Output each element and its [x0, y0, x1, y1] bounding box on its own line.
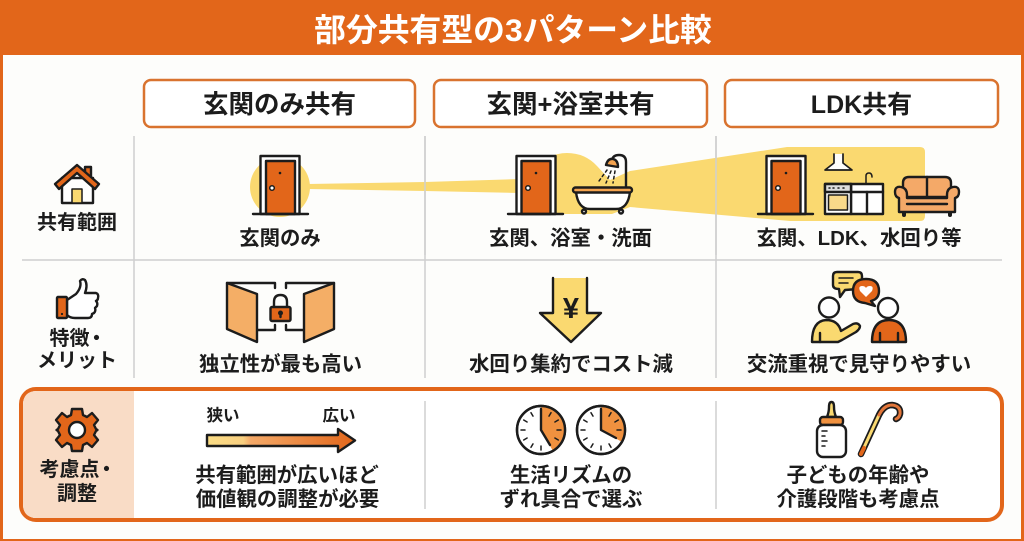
label: 交流重視で見守りやすい: 交流重視で見守りやすい — [747, 353, 971, 376]
icon: house — [55, 165, 99, 203]
text: 生活リズムのずれ具合で選ぶ — [500, 463, 642, 511]
text: 共有範囲が広いほど — [195, 463, 379, 511]
icon: door 1 — [253, 156, 308, 214]
row 1 label: 共有範囲: 共有範囲 — [37, 211, 117, 234]
row 2 label: 特徴・メリット: 特徴・ — [50, 327, 106, 350]
label: 玄関、浴室・洗面: 玄関、浴室・洗面 — [489, 227, 652, 250]
column header: 玄関のみ共有: 玄関のみ共有 — [203, 91, 356, 119]
icon: baby bottle — [817, 402, 846, 457]
label: 水回り集約でコスト減: 水回り集約でコスト減 — [469, 352, 674, 376]
label: 玄関、LDK、水回り等: 玄関、LDK、水回り等 — [756, 227, 962, 250]
icon: bathtub with shower — [573, 155, 632, 214]
row 3 label: 考慮点・調整: 考慮点・ — [40, 458, 116, 481]
text: 共有範囲が広いほど: 共有範囲が広いほど — [195, 463, 379, 487]
text: 生活リズムのずれ具合で選ぶ: 生活リズムの — [510, 463, 632, 487]
title: 部分共有型の3パターン比較 — [314, 12, 712, 48]
icon: door 2 — [508, 156, 563, 214]
row 3 label: 考慮点・調整: 調整 — [57, 482, 97, 505]
arrow: narrow to wide gradient — [207, 429, 355, 452]
row 1 label: 共有範囲 — [37, 165, 117, 234]
icon: sofa — [895, 177, 959, 215]
column header: 玄関+浴室共有: 玄関+浴室共有 — [487, 91, 654, 119]
shared range highlight band — [250, 147, 925, 221]
icon: two clocks — [517, 406, 625, 454]
icon: thumbs up — [57, 279, 98, 318]
text: 生活リズムのずれ具合で選ぶ: ずれ具合で選ぶ — [500, 488, 642, 511]
panel: considerations row — [21, 389, 1002, 520]
text: 子どもの年齢や介護段階も考慮点: 介護段階も考慮点 — [776, 488, 940, 511]
row 2 label: 特徴・メリット: メリット — [37, 350, 117, 372]
label: 広い: 広い — [322, 406, 356, 425]
label: 狭い: 狭い — [206, 406, 240, 425]
icon: two people talking — [812, 272, 906, 342]
column header: LDK共有 — [725, 80, 998, 127]
label: 玄関のみ: 玄関のみ — [239, 227, 321, 250]
icon: walking cane — [861, 405, 900, 454]
column header: 玄関のみ共有 — [144, 80, 415, 127]
row 2 label: 特徴・メリット — [37, 279, 117, 372]
row 3 label: 考慮点・調整 — [40, 409, 116, 505]
icon: separate doors with lock — [227, 283, 334, 342]
column header: 玄関+浴室共有 — [434, 80, 707, 127]
text: 子どもの年齢や介護段階も考慮点: 子どもの年齢や — [787, 464, 929, 487]
icon: kitchen — [825, 154, 883, 214]
label: 独立性が最も高い: 独立性が最も高い — [199, 352, 362, 376]
text: 共有範囲が広いほど: 価値観の調整が必要 — [196, 487, 379, 511]
column header: LDK共有: LDK共有 — [811, 91, 912, 119]
icon: yen down arrow: ¥ — [563, 293, 579, 325]
icon: yen down arrow — [540, 278, 601, 342]
text: 子どもの年齢や介護段階も考慮点 — [776, 464, 940, 511]
icon: door 3 — [758, 156, 813, 214]
icon: gear — [56, 409, 98, 451]
